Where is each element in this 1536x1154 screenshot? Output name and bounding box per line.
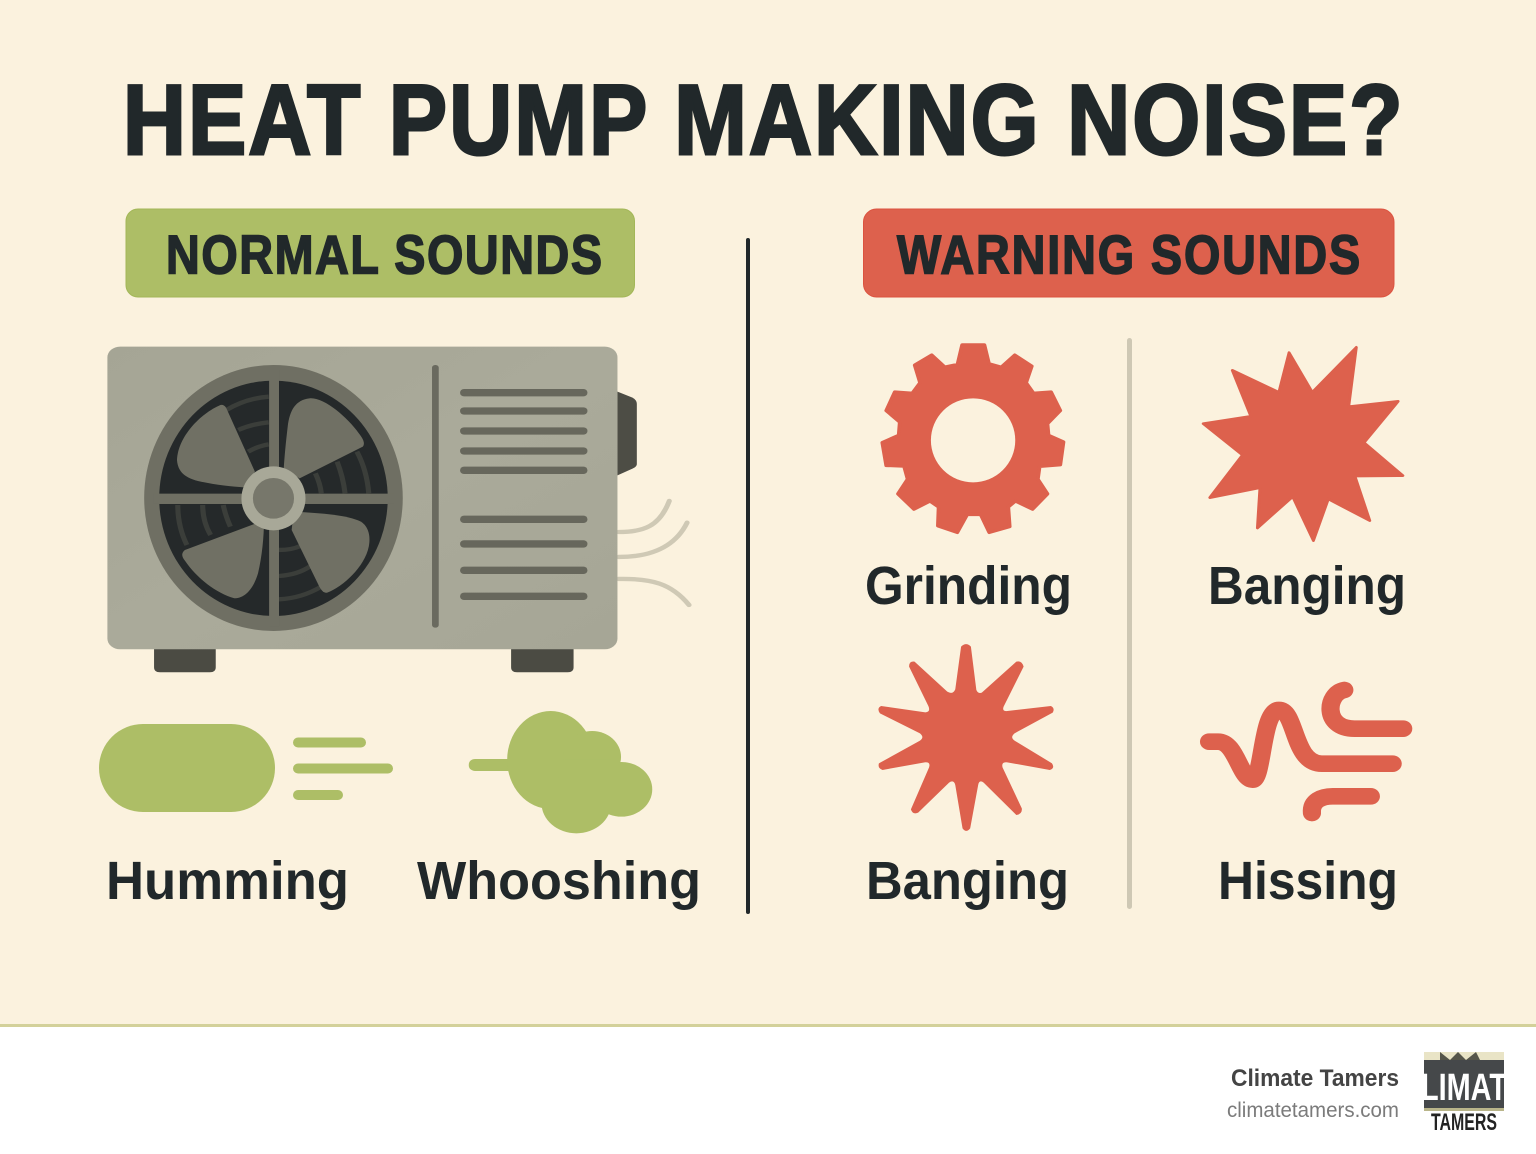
air flow lines: [619, 501, 689, 605]
fan opening: [159, 381, 388, 616]
label: banging bottom: Banging: [866, 851, 1069, 911]
central divider: [746, 238, 750, 914]
footer rule: [0, 1024, 1536, 1027]
panel: warning sounds: [864, 209, 1406, 911]
label: grinding: Grinding: [865, 556, 1072, 616]
unit body: [107, 347, 617, 649]
footer url: climatetamers.com: [1227, 1099, 1399, 1122]
label: hissing: Hissing: [1218, 851, 1398, 911]
left foot: [154, 647, 216, 672]
heading: warning sounds: [864, 209, 1394, 297]
panel divider: [432, 365, 439, 628]
label: banging top: Banging: [1208, 556, 1406, 616]
panel: normal sounds: [99, 209, 701, 911]
heading: normal sounds: NORMAL SOUNDS: [166, 224, 602, 285]
right foot: [511, 647, 574, 672]
gear hole: [931, 398, 1015, 482]
footer: [0, 1024, 1536, 1136]
fan ring: [144, 365, 403, 631]
icon: whooshing: [469, 711, 652, 833]
icon: gear: [882, 345, 1064, 532]
illustration: heat pump outdoor unit: [107, 347, 689, 672]
warning column divider: [1127, 338, 1132, 909]
footer brand name: Climate Tamers: [1231, 1065, 1399, 1092]
icon: hissing: [1209, 690, 1403, 813]
heading: normal sounds: [126, 209, 634, 297]
label: whooshing: Whooshing: [417, 851, 701, 911]
rear connector box: [617, 392, 637, 475]
label: humming: Humming: [106, 851, 349, 911]
logo: TAMERS: [1431, 1109, 1497, 1136]
louvers: [460, 389, 587, 600]
gear body: [882, 345, 1064, 532]
icon: starburst, banging top: [1203, 347, 1403, 541]
fan hub centre: [253, 478, 294, 519]
icon: starburst, banging bottom: [878, 644, 1054, 831]
fan guard arcs: [178, 397, 369, 599]
heading: warning sounds: WARNING SOUNDS: [897, 224, 1360, 285]
logo: [1424, 1052, 1504, 1130]
fan guard spokes: [153, 370, 394, 627]
title: HEAT PUMP MAKING NOISE?: [123, 65, 1403, 175]
fan hub: [241, 466, 305, 530]
icon: humming: [99, 724, 393, 812]
fan blades: [177, 398, 369, 598]
logo: LIMAT: [1421, 1067, 1507, 1109]
